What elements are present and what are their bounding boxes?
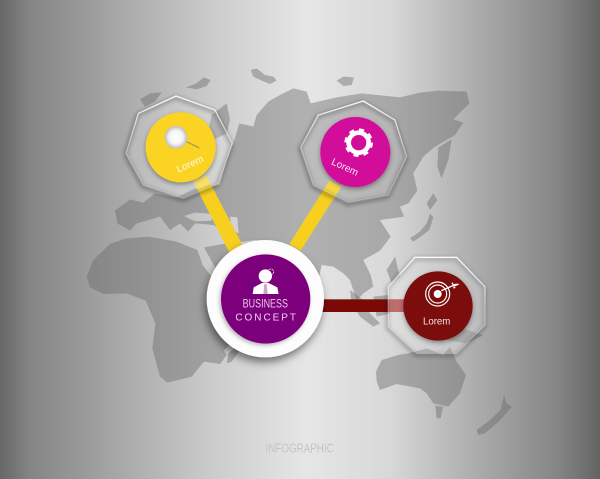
- icon: business person: [253, 269, 279, 294]
- map: Kamchatka: [437, 139, 452, 178]
- label: Lorem yellow: Lorem: [175, 154, 206, 176]
- circle: yellow: [146, 112, 216, 182]
- circle: dark red: [403, 271, 473, 341]
- label: Lorem dark red: Lorem: [423, 317, 450, 328]
- label: CONCEPT: CONCEPT: [235, 313, 296, 324]
- label: INFOGRAPHIC: INFOGRAPHIC: [266, 441, 334, 456]
- label: Lorem magenta: Lorem: [329, 157, 360, 179]
- octagon glass panel: [301, 101, 407, 202]
- octagon glass panel: [388, 257, 485, 353]
- octagon shadow: [125, 98, 232, 200]
- octagon shadow: [388, 259, 484, 355]
- map: Philippines: [387, 257, 400, 283]
- map: Novaya Zemlya: [251, 68, 277, 84]
- white ring: [207, 240, 324, 357]
- circle: purple: [221, 254, 310, 344]
- map: Severnaya Zemlya: [337, 77, 354, 86]
- world map: [87, 68, 512, 435]
- connector highlight: [193, 175, 211, 189]
- label: BUSINESS: BUSINESS: [243, 298, 288, 311]
- icon: magnifier: [165, 126, 199, 149]
- map: New Zealand: [477, 395, 512, 435]
- icon: target: [426, 282, 459, 306]
- map: Tasmania: [435, 405, 443, 419]
- connector: yellow left: [193, 175, 243, 254]
- icon: gear: [346, 130, 371, 155]
- octagon glass panel: [126, 96, 232, 198]
- map: Indonesia: [350, 290, 380, 327]
- connector: yellow right: [289, 181, 341, 251]
- octagon shadow: [300, 103, 406, 204]
- map: Eurasia: [115, 88, 469, 301]
- circle: magenta: [320, 117, 390, 187]
- central node: [207, 240, 324, 357]
- map: Madagascar: [227, 347, 240, 363]
- node: yellow: [125, 96, 232, 200]
- node: magenta: [300, 101, 407, 204]
- connector: dark red: [318, 299, 407, 312]
- map: Sakhalin: [427, 193, 437, 210]
- map: Australia: [376, 347, 466, 407]
- connector highlight: [389, 299, 406, 312]
- map: Japan: [410, 213, 433, 242]
- node: dark red: [388, 257, 485, 355]
- map: Arabia: [204, 242, 253, 277]
- map: Scandinavia: [208, 103, 230, 140]
- map: Franz Josef Land: [186, 77, 211, 89]
- map: Borneo and New Guinea: [373, 295, 483, 343]
- map: Africa: [87, 237, 237, 383]
- map: Svalbard: [140, 92, 162, 107]
